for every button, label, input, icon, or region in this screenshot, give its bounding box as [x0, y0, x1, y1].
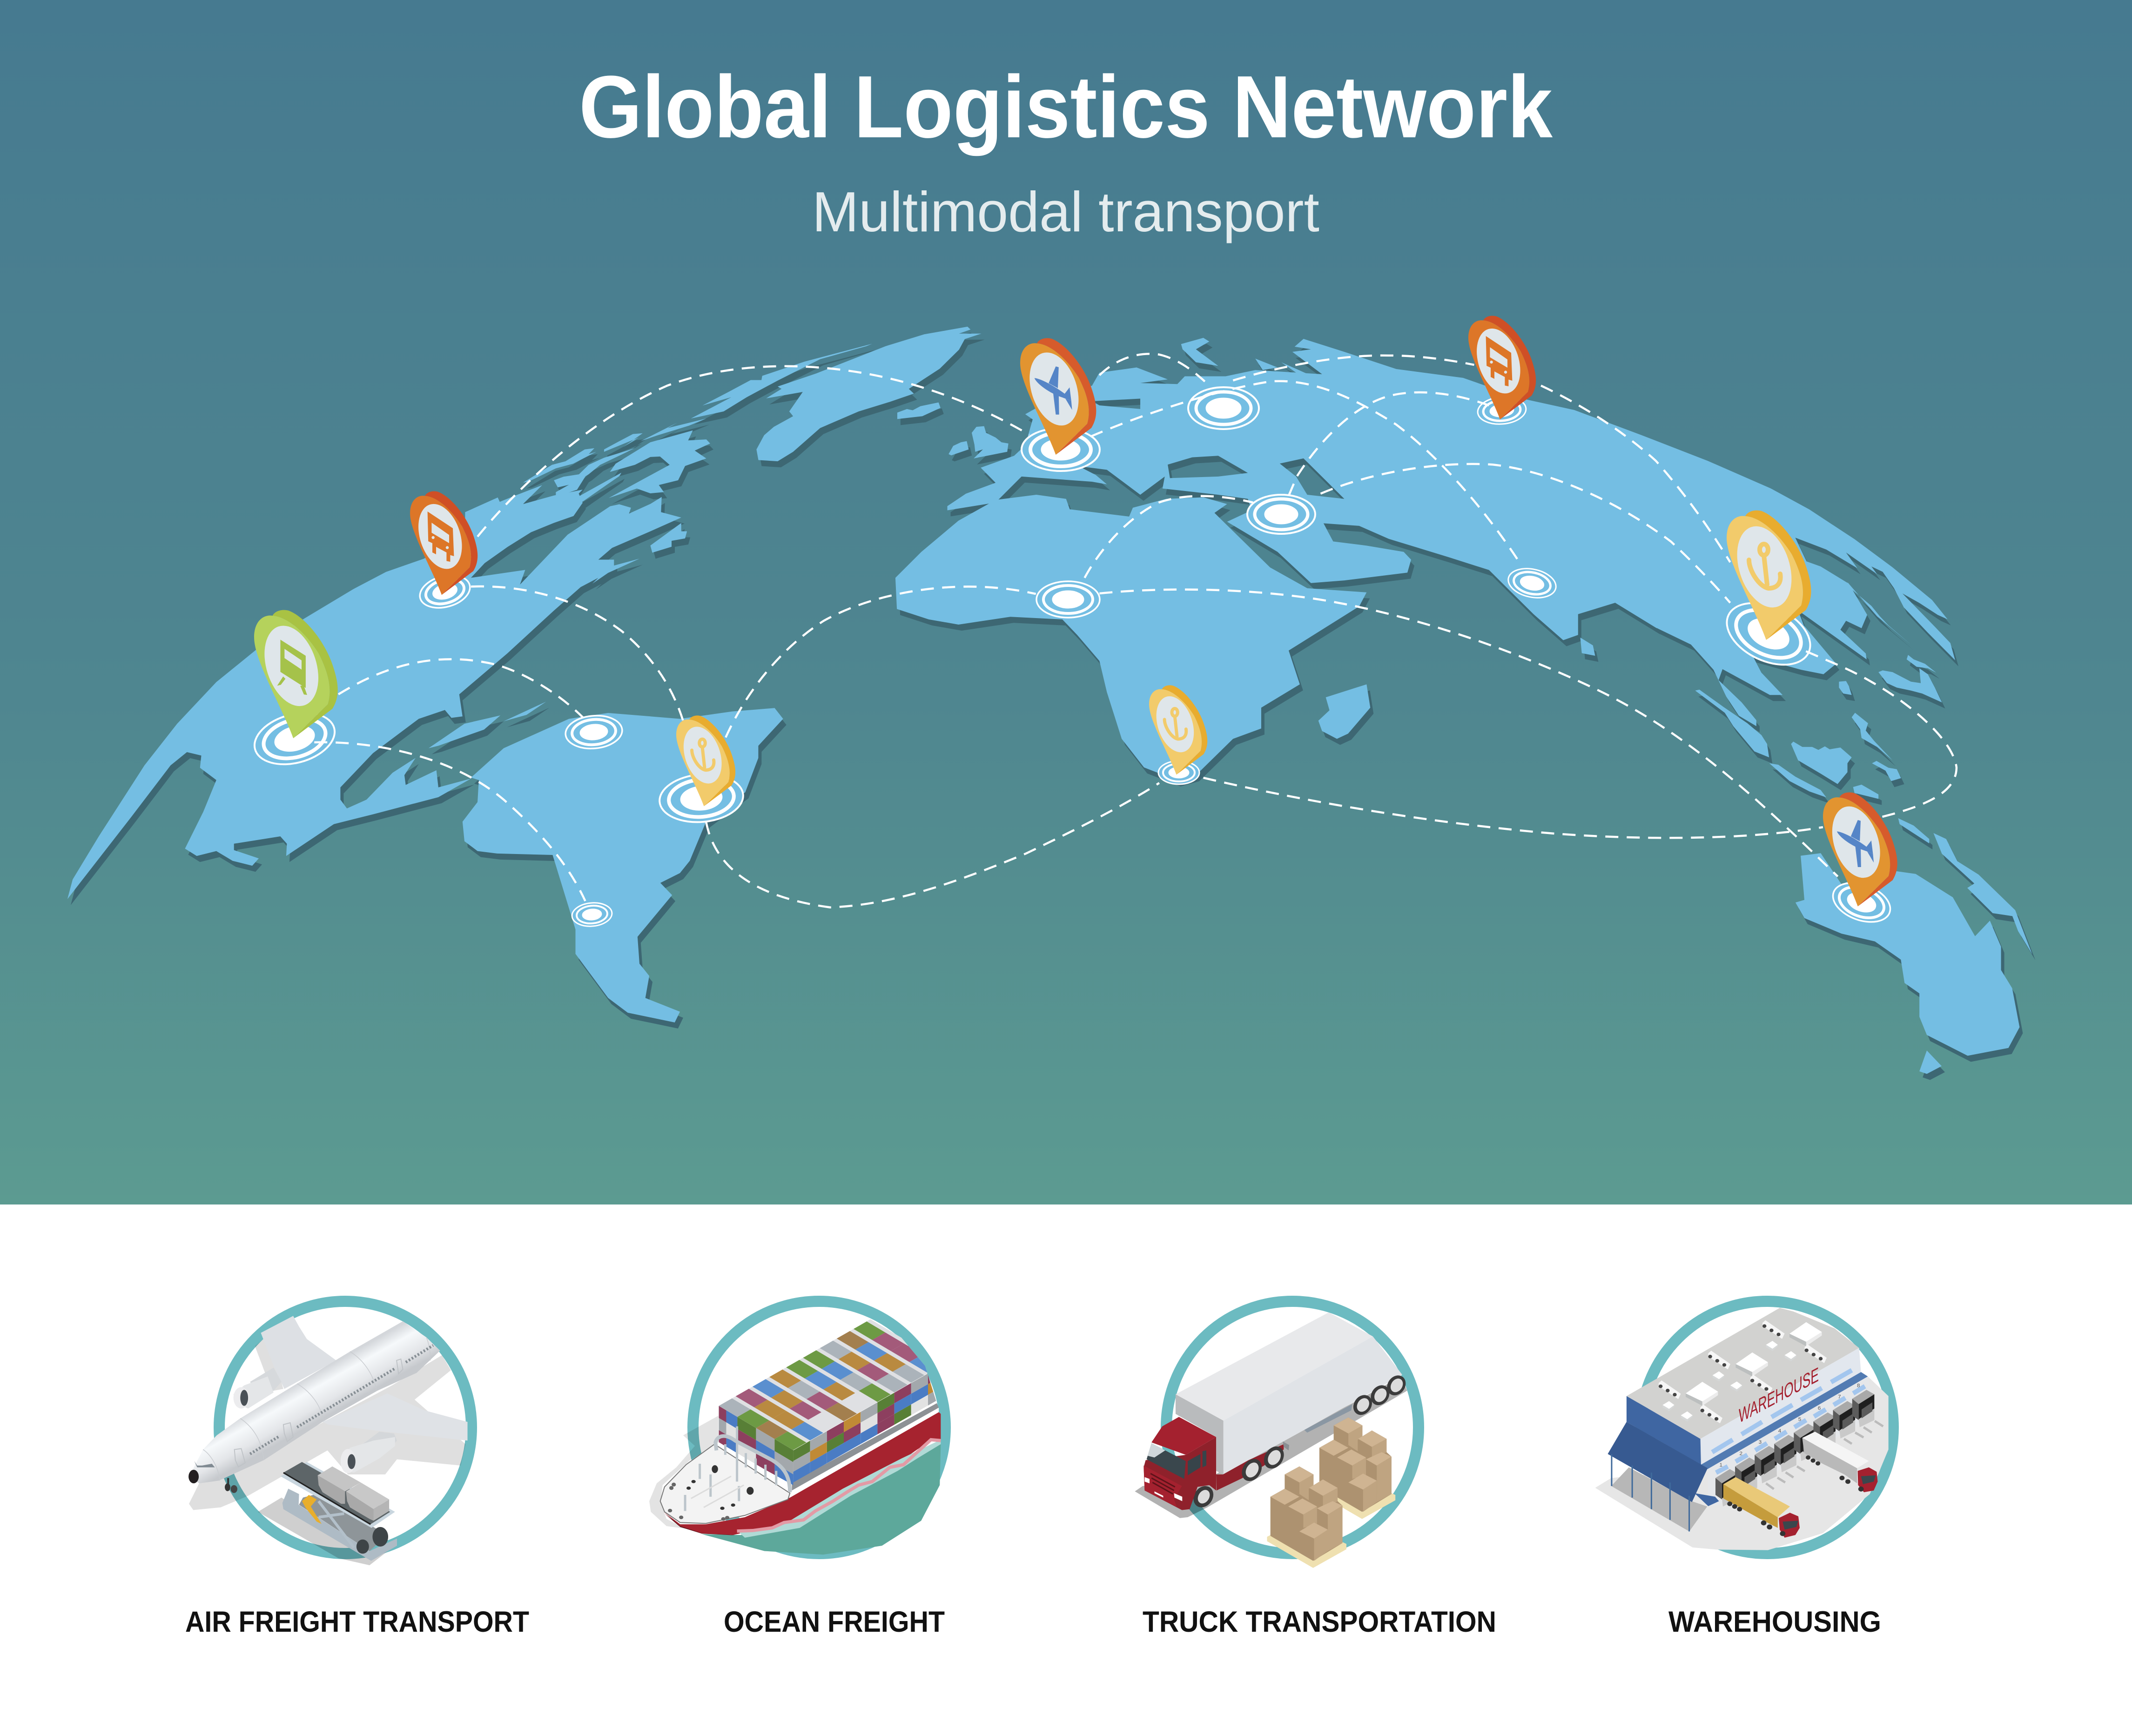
pin: bus, Canada: [410, 491, 478, 595]
illustration: container ship: [649, 1319, 945, 1554]
world map: [67, 316, 2035, 1080]
east asia and pacific islands: [1629, 489, 2032, 954]
panel: map background: [0, 0, 2132, 1204]
dashed routes: [314, 354, 1957, 908]
location rings: [249, 387, 1896, 929]
pin: train, North America: [254, 610, 338, 738]
warehouse building: 2: [1739, 1451, 1742, 1457]
americas: [67, 485, 783, 1023]
pin: bus, Russia: [1468, 316, 1536, 419]
illustration: airplane and loader: [188, 1316, 468, 1565]
warehouse building: 5: [1798, 1417, 1801, 1422]
label: air freight: AIR FREIGHT TRANSPORT: [185, 1606, 529, 1638]
label: ocean freight: OCEAN FREIGHT: [724, 1606, 945, 1638]
warehouse sign: WAREHOUSE: [1739, 1362, 1819, 1427]
pin: anchor, South Africa: [1149, 685, 1207, 775]
warehouse building: 4: [1778, 1429, 1781, 1434]
ring: warehouse: [1641, 1301, 1893, 1554]
routes west: [314, 366, 1159, 908]
pin: anchor, Brazil: [676, 715, 735, 806]
eurasia africa australia: [895, 338, 2019, 1074]
warehouse building: 3: [1759, 1440, 1762, 1445]
warehouse building: 1: [1720, 1462, 1722, 1468]
routes east: [1084, 354, 1957, 876]
pin: plane, Europe: [1020, 338, 1096, 455]
warehouse building: 8: [1857, 1383, 1860, 1388]
ring: ocean freight: [693, 1301, 945, 1554]
ring: truck: [1166, 1301, 1419, 1554]
title: Global Logistics Network: [579, 58, 1553, 156]
continent shadow: [71, 333, 2035, 1080]
label: truck: TRUCK TRANSPORTATION: [1143, 1606, 1496, 1638]
greenland and arctic islands: [523, 327, 1009, 552]
illustration: warehouse: [1595, 1308, 1889, 1550]
subtitle: Multimodal transport: [812, 180, 1319, 243]
illustration: truck and boxes: [1135, 1312, 1409, 1568]
ring: air freight: [219, 1301, 471, 1554]
pin: plane, Australia: [1823, 793, 1897, 907]
label: warehousing: WAREHOUSING: [1668, 1606, 1881, 1638]
warehouse building: [1595, 1308, 1889, 1550]
pin: anchor, China: [1727, 511, 1811, 640]
warehouse building: 7: [1838, 1394, 1841, 1400]
continents: [67, 327, 2032, 1074]
warehouse building: 6: [1818, 1406, 1821, 1411]
